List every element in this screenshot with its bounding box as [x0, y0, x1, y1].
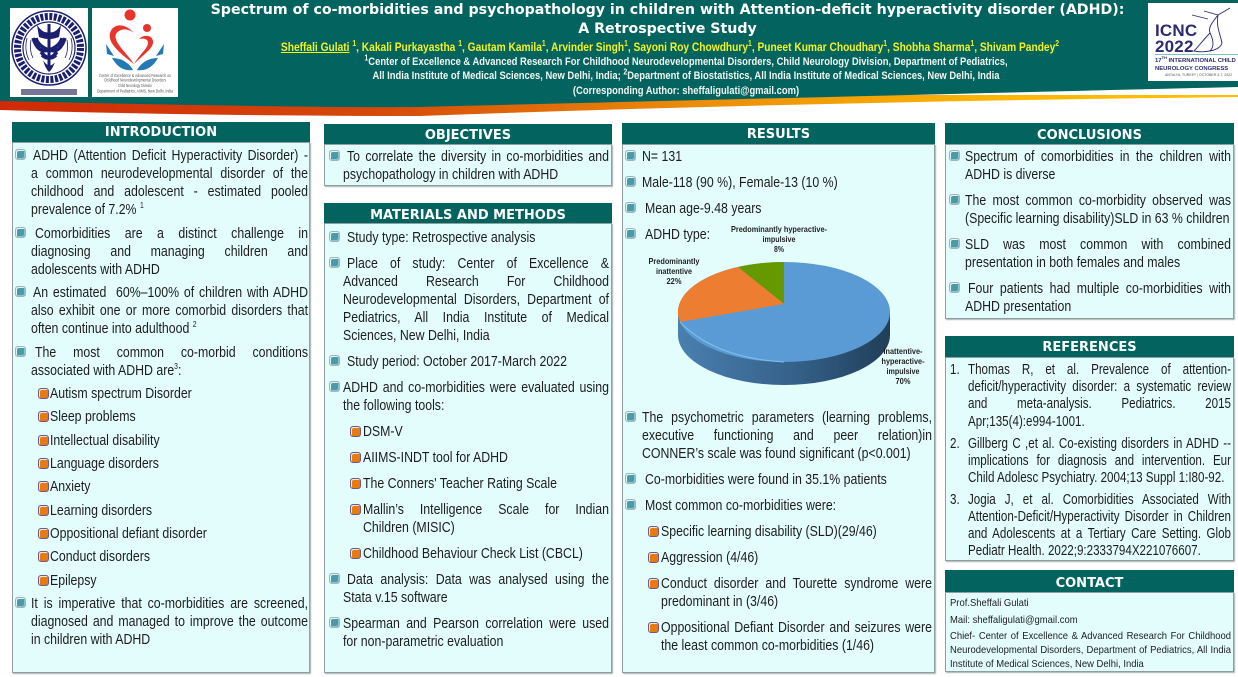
pie chart: ADHD type: inattentive	[656, 266, 692, 276]
pie chart: ADHD type: Predominantly	[648, 256, 700, 266]
logo: centre of excellence: Child Neurology Division	[118, 83, 152, 88]
logo: ICNC 2022: 2022	[1155, 36, 1194, 56]
heading: results: RESULTS	[747, 127, 810, 142]
affiliations: 1Center of Excellence & Advanced Research For Childhood Neurodevelopmental Disorders, Child Neurology Division, Department of Pediatrics,	[364, 53, 1008, 68]
pie chart: ADHD type: hyperactive-	[882, 356, 925, 366]
pie chart: ADHD type: Inattentive-	[884, 346, 923, 356]
references list: implications for diagnosis and intervention. Eur	[968, 453, 1231, 469]
methods text: Stata v.15 software	[343, 590, 448, 606]
banner	[0, 0, 1238, 116]
heading: objectives: OBJECTIVES	[425, 128, 511, 143]
results findings: The psychometric parameters (learning problems,	[642, 410, 932, 426]
references list: 1.	[950, 362, 960, 378]
panel: objectives	[324, 124, 614, 188]
references list	[950, 362, 1231, 559]
intro text: Intellectual disability	[50, 433, 160, 449]
intro text: It is imperative that co-morbidities are screened,	[31, 596, 308, 612]
pie chart: ADHD type: impulsive	[762, 234, 796, 244]
results summary: N= 131	[642, 149, 682, 165]
title: Spectrum of co-morbidities and psychopathology in children with Attention-deficit hyperactivity disorder (ADHD):	[211, 2, 1124, 18]
panel: materials and methods	[324, 203, 614, 674]
methods text: Children (MISIC)	[363, 520, 455, 536]
results findings: Co-morbidities were found in 35.1% patients	[645, 472, 887, 488]
intro text: a common neurodevelopmental disorder of the	[31, 166, 308, 182]
conclusions text: presentation in both females and males	[965, 255, 1180, 271]
references list: Thomas R, et al. Prevalence of attention-	[968, 362, 1231, 378]
intro text	[15, 148, 308, 648]
objectives text: To correlate the diversity in co-morbidities and	[347, 149, 609, 165]
methods text: Study period: October 2017-March 2022	[347, 354, 567, 370]
results findings: executive functioning and peer relation)in	[642, 428, 932, 444]
pie chart: ADHD type: Predominantly hyperactive-	[731, 224, 827, 234]
intro text: ADHD (Attention Deficit Hyperactivity Disorder) -	[33, 148, 308, 164]
intro text: Learning disorders	[50, 503, 152, 519]
methods text	[329, 230, 609, 650]
intro text: The most common co-morbid conditions	[35, 345, 308, 361]
results findings: CONNER’s scale was found significant (p<0.001)	[642, 446, 911, 462]
methods text: the following tools:	[343, 398, 444, 414]
references list: Pediatr Health. 2022;9:2333794X221076607.	[968, 543, 1201, 559]
panel: results	[622, 123, 936, 674]
references list: Child Adolesc Psychiatry. 2004;13 Suppl 1:I80-92.	[968, 470, 1224, 486]
references list: 2.	[950, 436, 960, 452]
references list: Gillberg C ,et al. Co-existing disorders in ADHD --	[968, 436, 1231, 452]
intro text: Comorbidities are a distinct challenge in	[35, 226, 308, 242]
references list: and meta-analysis. Pediatrics. 2015	[968, 396, 1231, 412]
pie chart: ADHD type: 8%	[774, 244, 784, 254]
results findings	[625, 410, 932, 654]
pie chart: ADHD type: 22%	[666, 276, 682, 286]
references list: Jogia J, et al. Comorbidities Associated With	[968, 492, 1231, 508]
conclusions text: (Specific learning disability)SLD in 63 % children	[965, 211, 1229, 227]
methods text: for non-parametric evaluation	[343, 634, 503, 650]
results findings: Conduct disorder and Tourette syndrome were	[661, 576, 932, 592]
methods text: Neurodevelopmental Disorders, Department of	[343, 292, 609, 308]
methods text: AIIMS-INDT tool for ADHD	[363, 450, 508, 466]
methods text: Study type: Retrospective analysis	[347, 230, 535, 246]
contact details: Neurodevelopmental Disorders, Department of Pediatrics, All India	[950, 644, 1231, 656]
logo: ICNC 2022: ANTALYA, TURKEY | OCTOBER 3-7, 2022	[1165, 73, 1232, 77]
conclusions text: Four patients had multiple co-morbidities with	[968, 281, 1231, 297]
intro text: in children with ADHD	[31, 632, 150, 648]
conclusions text: ADHD presentation	[965, 299, 1071, 315]
intro text: adolescents with ADHD	[31, 262, 160, 278]
references list: deficit/hyperactivity disorder: a systematic review	[968, 379, 1231, 395]
heading: materials and methods	[324, 203, 612, 223]
results summary: ADHD type:	[645, 227, 710, 243]
logo: ICNC 2022: 17TH INTERNATIONAL CHILD	[1155, 55, 1236, 64]
conclusions text: Spectrum of comorbidities in the children with	[965, 149, 1231, 165]
objectives text: psychopathology in children with ADHD	[343, 167, 558, 183]
heading: references	[945, 336, 1234, 357]
logo: ICNC 2022: NEUROLOGY CONGRESS	[1155, 66, 1228, 72]
conclusions text: SLD was most common with combined	[965, 237, 1231, 253]
logo: ICNC 2022	[1148, 3, 1238, 81]
panel: contact	[945, 570, 1236, 674]
results findings: Aggression (4/46)	[661, 550, 758, 566]
intro text: Anxiety	[50, 479, 90, 495]
panel: conclusions	[945, 123, 1236, 320]
title	[211, 2, 1124, 36]
references list: and Adolescents at a Tertiary Care Setting. Glob	[968, 526, 1231, 542]
results findings: predominant in (3/46)	[661, 594, 778, 610]
conclusions text: The most common co-morbidity observed was	[965, 193, 1231, 209]
results summary: Male-118 (90 %), Female-13 (10 %)	[642, 175, 838, 191]
intro text: An estimated 60%–100% of children with ADHD	[33, 285, 308, 301]
intro text: Conduct disorders	[50, 549, 150, 565]
conclusions text	[949, 149, 1231, 315]
heading: results	[622, 123, 935, 144]
heading: materials and methods: MATERIALS AND METHODS	[370, 208, 566, 223]
pie chart: ADHD type	[648, 224, 925, 386]
intro text: often continue into adulthood 2	[31, 320, 197, 337]
results summary: Mean age-9.48 years	[645, 201, 761, 217]
intro text: also exhibit one or more comorbid disorders that	[31, 303, 308, 319]
affiliations: All India Institute of Medical Sciences, New Delhi, India; 2Department of Biostatistics, All India Institute of Medical Sciences, New Delhi, India	[372, 67, 1000, 82]
heading: introduction	[12, 122, 310, 142]
intro text: Sleep problems	[50, 409, 136, 425]
methods text: Data analysis: Data was analysed using the	[347, 572, 609, 588]
results findings: Oppositional Defiant Disorder and seizures were	[661, 620, 932, 636]
logo: ICNC 2022: ICNC	[1155, 21, 1197, 40]
results findings: Specific learning disability (SLD)(29/46)	[661, 524, 877, 540]
pie chart: ADHD type: 70%	[896, 376, 911, 386]
intro text: prevalence of 7.2% 1	[31, 201, 144, 218]
intro text: associated with ADHD are3:	[31, 362, 181, 379]
panel: introduction	[12, 122, 312, 674]
references list: Attention-Deficit/Hyperactivity Disorder in Children	[968, 509, 1231, 525]
methods text: Childhood Behaviour Check List (CBCL)	[363, 546, 583, 562]
heading: contact: CONTACT	[1056, 576, 1123, 591]
objectives text	[329, 149, 609, 183]
heading: objectives	[324, 124, 612, 144]
contact details: Prof.Sheffali Gulati	[950, 597, 1029, 609]
references list: 3.	[950, 492, 960, 508]
heading: conclusions	[945, 123, 1234, 144]
heading: conclusions: CONCLUSIONS	[1037, 128, 1142, 143]
affiliations	[364, 53, 1008, 96]
contact details: Chief- Center of Excellence & Advanced Research For Childhood	[950, 630, 1231, 642]
logo: AIIMS	[10, 8, 88, 97]
methods text: Pediatrics, All India Institute of Medical	[343, 310, 609, 326]
results findings: the least common co-morbidities (1/46)	[661, 638, 874, 654]
heading: contact	[945, 570, 1234, 592]
title: A Retrospective Study	[578, 20, 757, 36]
panel: references	[945, 336, 1236, 562]
methods text: DSM-V	[363, 424, 403, 440]
contact details	[950, 597, 1231, 670]
heading: references: REFERENCES	[1042, 340, 1137, 355]
authors: Sheffali Gulati 1, Kakali Purkayastha 1, Gautam Kamila1, Arvinder Singh1, Sayoni Roy Chowdhury1, Puneet Kumar Choudhary1, Shobha Sharma1, Shivam Pandey2	[281, 39, 1059, 54]
contact details: Mail: sheffaligulati@gmail.com	[950, 614, 1078, 626]
methods text: Advanced Research For Childhood	[343, 274, 609, 290]
references list: Apr;135(4):e994-1001.	[968, 414, 1085, 430]
methods text: Sciences, New Delhi, India	[343, 328, 490, 344]
methods text: ADHD and co-morbidities were evaluated using	[343, 380, 609, 396]
intro text: Autism spectrum Disorder	[50, 386, 192, 402]
methods text: Place of study: Center of Excellence &	[347, 256, 609, 272]
intro text: Epilepsy	[50, 573, 97, 589]
contact details: Institute of Medical Sciences, New Delhi, India	[950, 658, 1144, 670]
affiliations: (Corresponding Author: sheffaligulati@gmail.com)	[573, 84, 799, 96]
logo: centre of excellence	[92, 8, 178, 97]
intro text: Language disorders	[50, 456, 159, 472]
results findings: Most common co-morbidities were:	[645, 498, 836, 514]
conclusions text: ADHD is diverse	[965, 167, 1055, 183]
intro text: childhood and adolescent - estimated pooled	[31, 184, 308, 200]
methods text: The Conners' Teacher Rating Scale	[363, 476, 557, 492]
intro text: diagnosed and managed to improve the outcome	[31, 614, 308, 630]
methods text: Spearman and Pearson correlation were used	[343, 616, 609, 632]
intro text: diagnosing and managing children and	[31, 244, 308, 260]
pie chart: ADHD type: impulsive	[886, 366, 920, 376]
results summary	[625, 149, 838, 243]
methods text: Mallin’s Intelligence Scale for Indian	[363, 502, 609, 518]
intro text: Oppositional defiant disorder	[50, 526, 207, 542]
heading: introduction: INTRODUCTION	[105, 125, 217, 140]
